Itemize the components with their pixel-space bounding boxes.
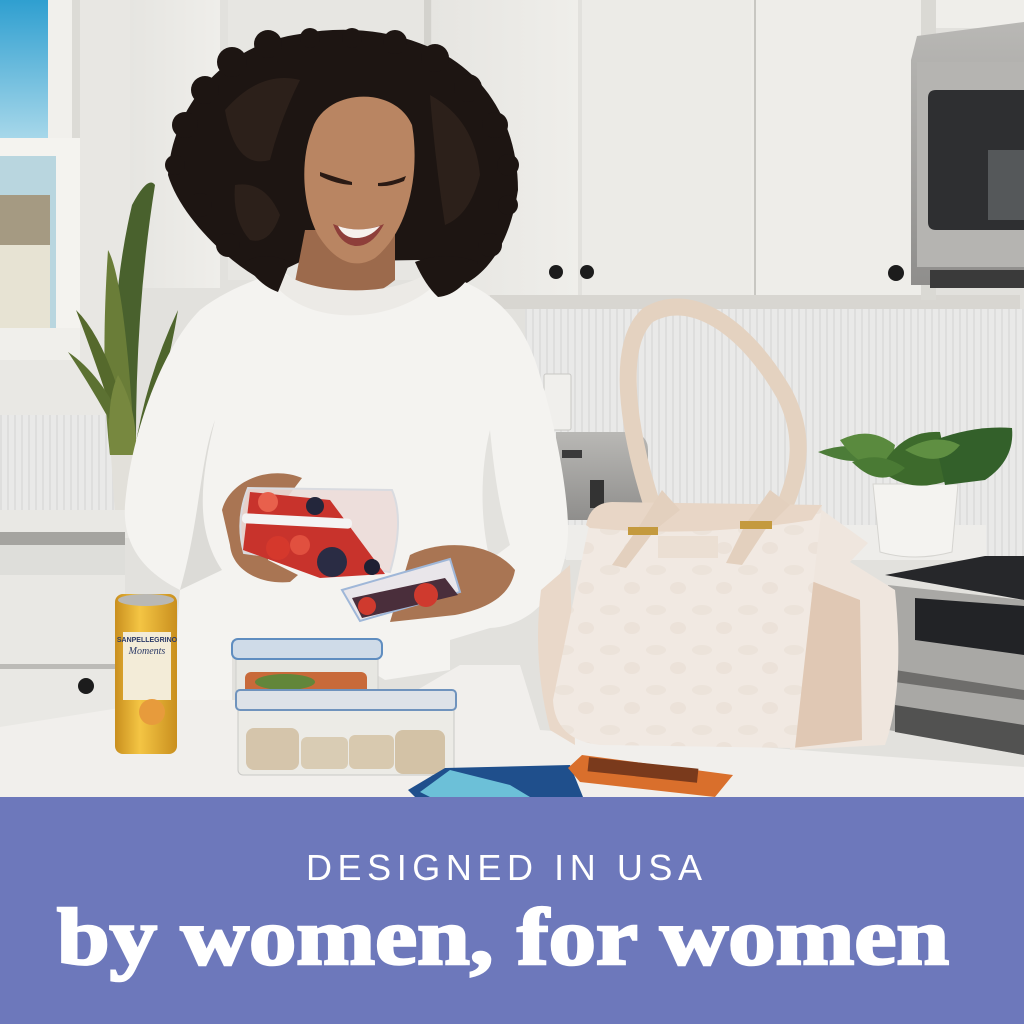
toaster	[556, 432, 648, 520]
upper cabinets	[130, 0, 1024, 309]
bag straps	[612, 490, 680, 568]
sparkling drink can: Moments	[128, 646, 165, 657]
potted plant	[818, 428, 1012, 557]
microwave	[911, 22, 1024, 288]
tilted container with berries	[240, 488, 398, 578]
background: kitchen wall	[0, 0, 1024, 800]
banner headline: by women, for women: by women, for women	[57, 894, 949, 982]
bag handle	[628, 307, 798, 505]
sparkling drink can: SANPELLEGRINO	[117, 637, 178, 644]
snack packets	[408, 755, 733, 797]
collar	[275, 268, 442, 315]
left lower cabinets and counter	[0, 510, 130, 727]
sweater	[125, 270, 568, 700]
hands	[222, 473, 302, 582]
bag side panel	[790, 505, 898, 750]
small container with berries	[342, 559, 460, 621]
stacked food containers	[232, 639, 456, 775]
bag body	[553, 505, 822, 748]
hair locks over shoulders	[245, 256, 478, 297]
sparkling drink can	[115, 594, 178, 754]
woman	[125, 28, 568, 700]
lunch tote bag	[538, 307, 898, 750]
right counter back and stove	[566, 525, 1024, 755]
window	[0, 0, 130, 510]
hair	[165, 28, 519, 292]
face	[304, 97, 415, 263]
banner background	[0, 797, 1024, 1024]
wall outlet	[544, 374, 571, 430]
bag left panel	[538, 565, 575, 745]
banner heading: designed in USA: DESIGNED IN USA	[306, 847, 702, 888]
backsplash	[525, 309, 1024, 559]
snake plant	[68, 182, 178, 515]
neck	[295, 230, 395, 300]
countertop	[0, 665, 1024, 797]
